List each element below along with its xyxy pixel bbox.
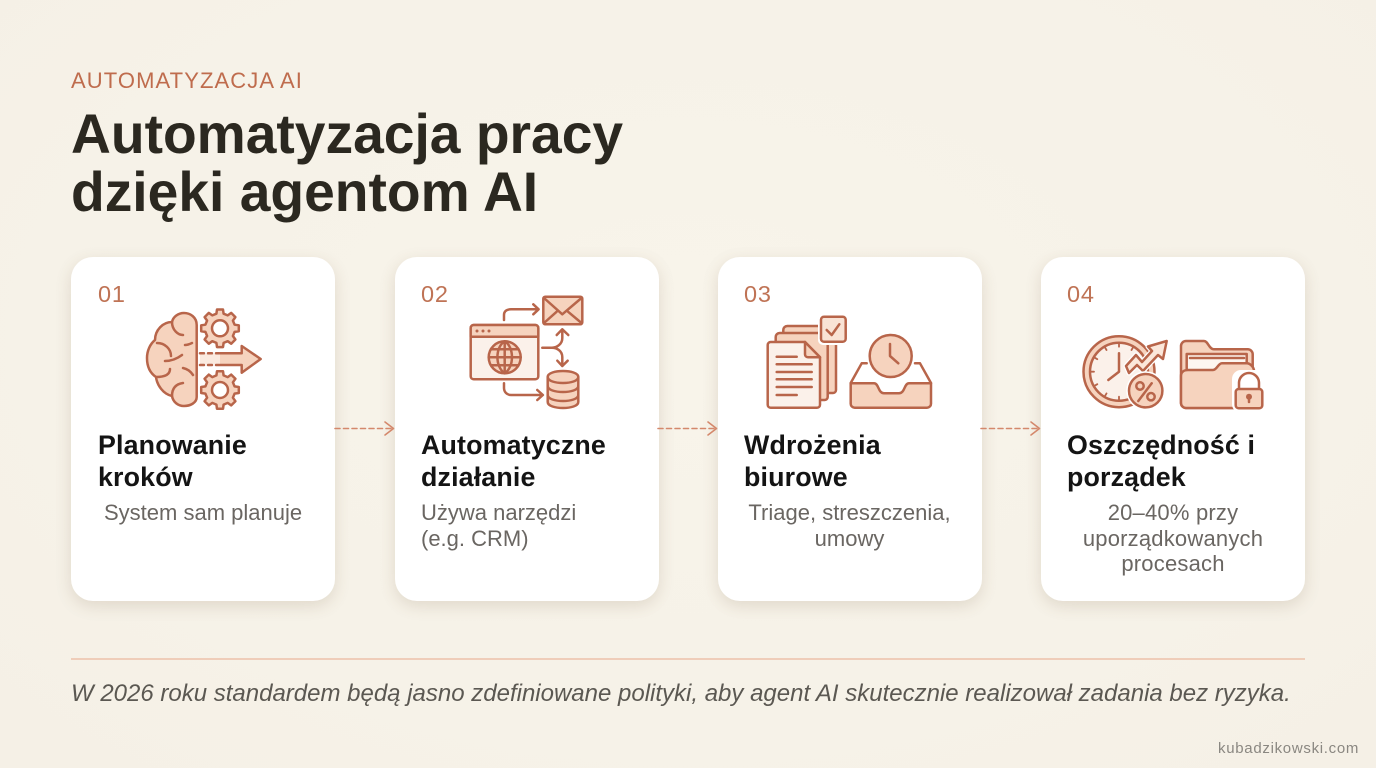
heading 4: Oszczędność i [1067, 430, 1255, 460]
body text 4: procesach [1121, 551, 1225, 576]
number 01: 01 [98, 281, 126, 307]
body text 3: Triage, streszczenia, [748, 500, 951, 525]
arrow 2 to 3 [657, 421, 718, 436]
number 03: 03 [744, 281, 772, 307]
card 2: Automatyczne działanie [394, 257, 658, 601]
card 1: Planowanie kroków [71, 257, 335, 601]
icon: documents with checkbox and inbox tray with clock [766, 316, 932, 409]
body text 2 [421, 500, 576, 550]
body text 4 [1083, 500, 1263, 576]
heading 3: Wdrożenia [744, 430, 881, 460]
title: Automatyzacja pracy [71, 103, 623, 165]
heading 1: kroków [98, 462, 193, 492]
number 04: 04 [1067, 281, 1095, 307]
body text 4: 20–40% przy [1108, 500, 1238, 525]
icon: brain, gears and arrow [146, 308, 262, 410]
arrow 3 to 4 [980, 421, 1040, 436]
heading 3 [744, 430, 881, 492]
card 3: Wdrożenia biurowe [718, 257, 982, 601]
title [71, 103, 623, 223]
body text 1: System sam planuje [104, 500, 302, 525]
body text 2: Używa narzędzi [421, 500, 576, 525]
icon: browser, mail and database workflow [469, 296, 584, 410]
heading 4 [1067, 430, 1255, 492]
eyebrow label: AUTOMATYZACJA AI [71, 68, 303, 93]
heading 3: biurowe [744, 462, 848, 492]
body text 3 [748, 500, 951, 550]
heading 2: Automatyczne [421, 430, 606, 460]
card 4: Oszczędność i porządek [1041, 257, 1305, 601]
number 02: 02 [421, 281, 449, 307]
body text 4: uporządkowanych [1083, 526, 1263, 550]
heading 4: porządek [1067, 462, 1186, 492]
heading 2 [421, 430, 606, 492]
body text 3: umowy [815, 526, 884, 550]
icon: clock with percent and trend, locked folder [1082, 335, 1264, 410]
arrow 1 to 2 [334, 421, 394, 436]
body text 2: (e.g. CRM) [421, 526, 529, 550]
title: dzięki agentom AI [71, 161, 538, 223]
heading 1: Planowanie [98, 430, 247, 460]
heading 2: działanie [421, 462, 536, 492]
heading 1 [98, 430, 247, 492]
footer statement: W 2026 roku standardem będą jasno zdefiniowane polityki, aby agent AI skutecznie realizował zadania bez ryzyka. [71, 680, 1291, 707]
watermark: kubadzikowski.com [1218, 740, 1359, 757]
